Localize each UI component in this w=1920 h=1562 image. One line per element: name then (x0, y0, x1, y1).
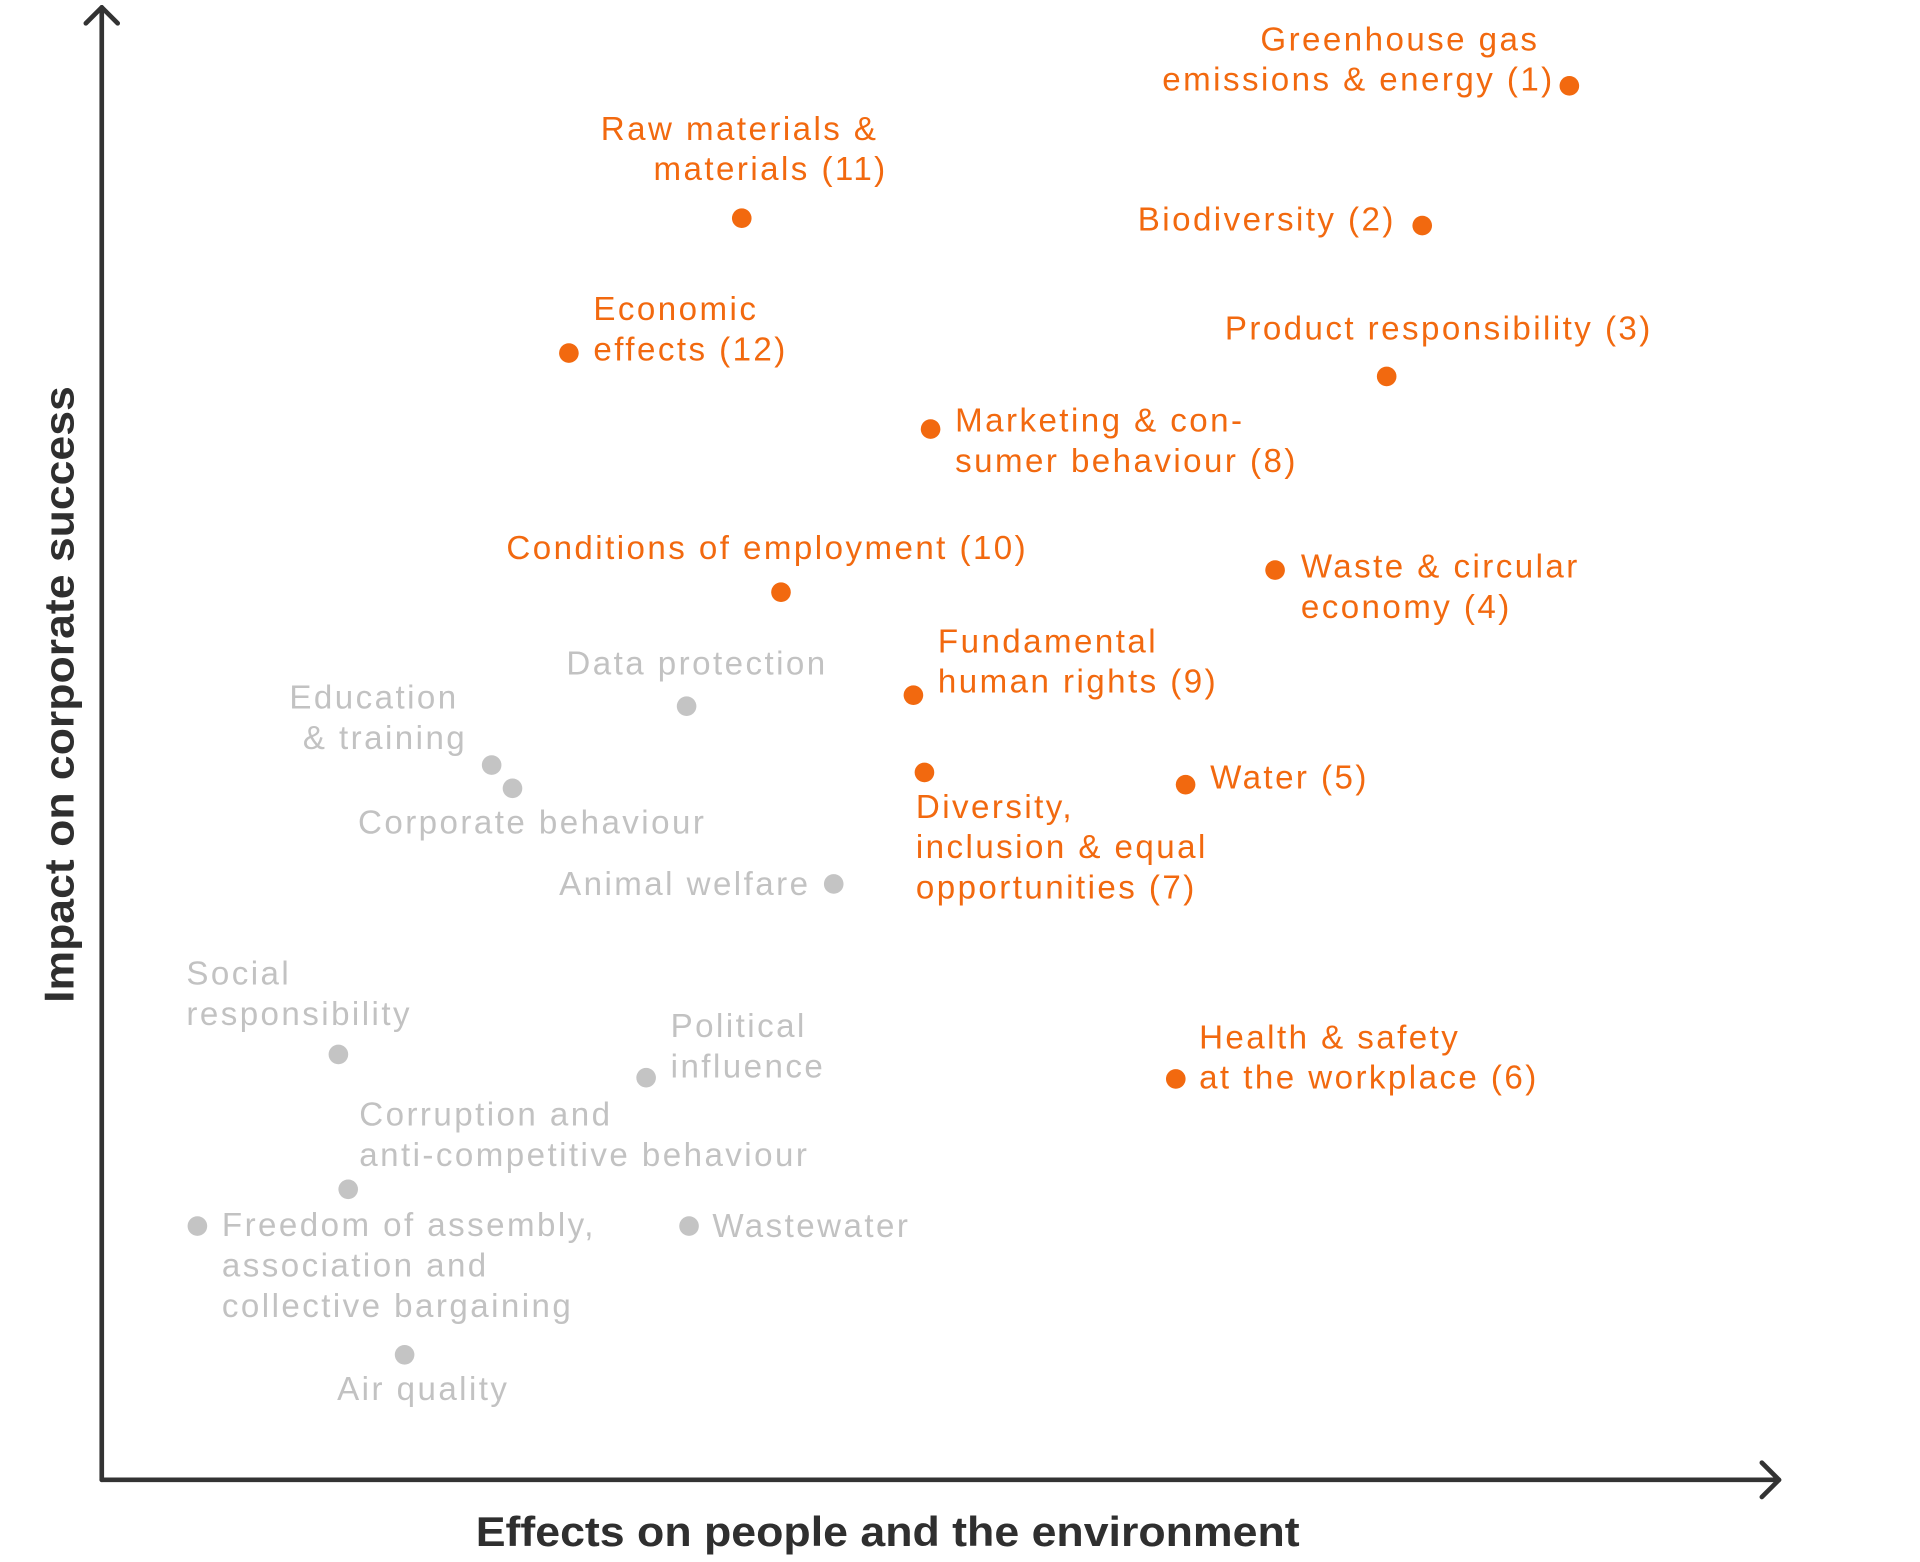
point 10: conditions of employment (506, 530, 1028, 602)
point 11: raw materials: Raw materials & (601, 111, 878, 148)
point: corporate behaviour: Corporate behaviour (358, 805, 706, 842)
point: air quality (337, 1345, 509, 1408)
point 12: economic effects: effects (12) (593, 331, 788, 368)
point 1: greenhouse gas: emissions & energy (1) (1162, 62, 1555, 99)
point: freedom of assembly: collective bargaining (222, 1288, 573, 1325)
point: air quality: Air quality (337, 1371, 509, 1408)
point 12: economic effects: Economic (593, 291, 758, 328)
point: social responsibility: Social (186, 956, 291, 993)
point 9: human rights (904, 623, 1218, 705)
point: corruption (338, 1097, 809, 1199)
point 1: greenhouse gas (1162, 21, 1579, 99)
x axis arrow (102, 1463, 1779, 1497)
point 3: product responsibility (1225, 311, 1653, 386)
point: corporate behaviour (358, 779, 706, 842)
point: animal welfare: Animal welfare (559, 866, 810, 903)
point 2: biodiversity: Biodiversity (2) (1138, 201, 1396, 238)
point 7: diversity: Diversity, (916, 789, 1074, 826)
point 8: marketing: Marketing & con- (955, 403, 1244, 440)
point 11: raw materials (601, 111, 888, 228)
point 12: economic effects (559, 291, 788, 368)
point: education & training: Education (289, 680, 459, 717)
point 1: greenhouse gas: Greenhouse gas (1260, 21, 1539, 58)
point: freedom of assembly: association and (222, 1247, 489, 1284)
point: political influence: Political (671, 1008, 807, 1045)
point: data protection (566, 645, 828, 716)
point 7: diversity (915, 763, 1208, 907)
point: political influence: influence (671, 1049, 825, 1086)
point 7: diversity: inclusion & equal (916, 829, 1208, 866)
point 8: marketing: sumer behaviour (8) (955, 443, 1298, 480)
point 4: waste: Waste & circular (1301, 548, 1580, 585)
point 4: waste (1265, 548, 1580, 626)
point: wastewater: Wastewater (712, 1208, 910, 1245)
point 4: waste: economy (4) (1301, 589, 1512, 626)
point 10: conditions of employment: Conditions of employment (10) (506, 530, 1028, 567)
point 6: health & safety (1166, 1019, 1539, 1097)
point 3: product responsibility: Product responsibility (3) (1225, 311, 1653, 348)
point: social responsibility: responsibility (186, 996, 412, 1033)
point 9: human rights: human rights (9) (938, 664, 1218, 701)
point: freedom of assembly: Freedom of assembly, (222, 1207, 596, 1244)
point: corruption: anti-competitive behaviour (359, 1137, 809, 1174)
point 5: water: Water (5) (1210, 759, 1369, 796)
y axis arrow (86, 7, 118, 1480)
point: corruption: Corruption and (359, 1097, 612, 1134)
point 11: raw materials: materials (11) (653, 151, 888, 188)
point: social responsibility (186, 956, 412, 1064)
point 8: marketing (921, 403, 1298, 480)
point: freedom of assembly (188, 1207, 596, 1325)
point 7: diversity: opportunities (7) (916, 870, 1197, 907)
x axis label: Effects on people and the environment (476, 1508, 1300, 1555)
point: education & training (289, 680, 501, 775)
point 9: human rights: Fundamental (938, 623, 1158, 660)
y axis label: Impact on corporate success (36, 386, 83, 1003)
point 6: health & safety: Health & safety (1199, 1019, 1460, 1056)
point: data protection: Data protection (566, 645, 828, 682)
point: education & training: & training (303, 720, 467, 757)
point 6: health & safety: at the workplace (6) (1199, 1060, 1539, 1097)
point: political influence (636, 1008, 825, 1088)
